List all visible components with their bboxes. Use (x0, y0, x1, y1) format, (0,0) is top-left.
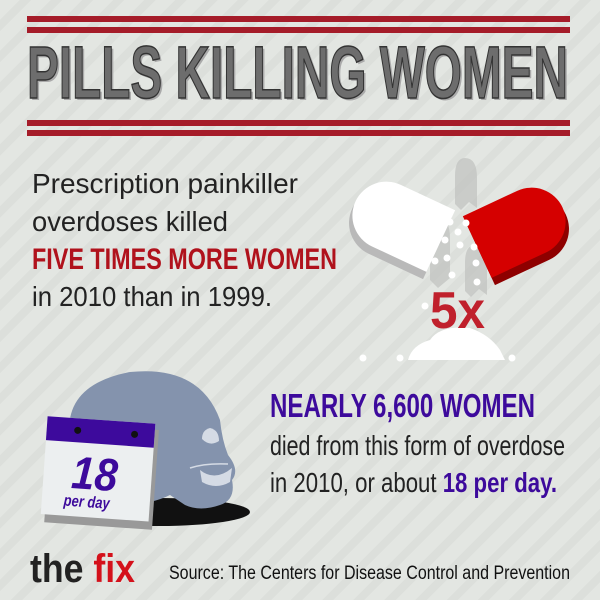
text block: 6,600 women: in 2010, or about 18 per day. (270, 467, 557, 498)
title bars bottom (27, 120, 570, 136)
illustration: pill (349, 158, 569, 362)
5x: 5x (430, 282, 485, 340)
text block: five times: overdoses killed (32, 206, 228, 237)
illustration: skull with calendar: per day (62, 493, 111, 513)
text block: five times: Prescription painkiller (32, 168, 298, 199)
text block: five times (32, 168, 337, 312)
text block: 6,600 women (270, 387, 565, 498)
illustration: skull with calendar: 18 (70, 446, 120, 501)
logo: the fix: the fix (30, 547, 135, 591)
illustration: skull with calendar (40, 371, 250, 530)
text block: five times: in 2010 than in 1999. (32, 281, 272, 312)
title bars top (27, 16, 570, 33)
text block: five times: FIVE TIMES MORE WOMEN (32, 243, 337, 276)
